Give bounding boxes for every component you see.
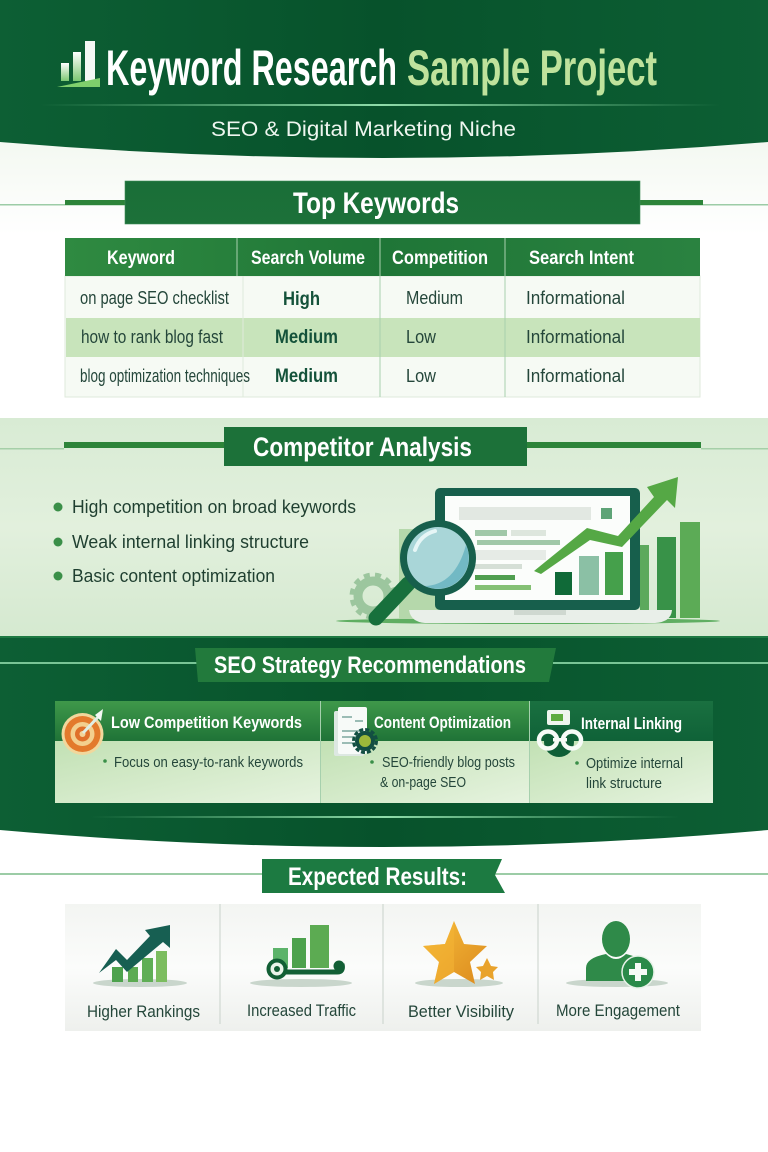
illustration: laptop with magnifier and growth chart: [336, 477, 720, 624]
heading: Competitor Analysis: [224, 427, 527, 466]
row 2: Informational: [526, 327, 625, 347]
result: more engagement: [556, 921, 680, 1020]
result: more engagement: More Engagement: [556, 1001, 680, 1020]
result: better visibility: Better Visibility: [408, 1002, 514, 1021]
heading: SEO Strategy Recommendations: SEO Strategy Recommendations: [214, 652, 526, 679]
row 3: Informational: [526, 366, 625, 386]
card: content optimization: Content Optimization: [374, 713, 511, 732]
result: increased traffic: Increased Traffic: [247, 1001, 356, 1020]
row 1: High: [283, 289, 320, 310]
icon: gear: [352, 575, 394, 617]
row 1: [80, 288, 625, 310]
card: internal linking: link structure: [586, 775, 662, 792]
table header: Competition: [392, 248, 488, 269]
card: internal linking: Optimize internal: [586, 755, 683, 772]
card: low competition keywords: Low Competition Keywords: [111, 713, 302, 732]
row 2: [81, 327, 625, 348]
result: better visibility: [408, 921, 514, 1021]
bullet list: [54, 497, 356, 586]
row 3: Low: [406, 366, 437, 386]
card: low competition keywords: [55, 701, 320, 803]
row 3: [80, 366, 625, 387]
header band: [0, 0, 768, 158]
row 3: Medium: [275, 366, 338, 387]
card: internal linking: [530, 701, 713, 803]
card: low competition keywords: Focus on easy-to-rank keywords: [114, 754, 303, 771]
row 1: Medium: [406, 288, 463, 308]
card: content optimization: & on-page SEO: [380, 774, 466, 791]
table header: Search Intent: [529, 248, 635, 269]
row 2: Medium: [275, 327, 338, 348]
bullet list: High competition on broad keywords: [72, 497, 356, 517]
icon: document and gear: [334, 707, 376, 756]
card: internal linking: Internal Linking: [581, 714, 682, 733]
panel: expected results: [65, 904, 701, 1031]
heading: Expected Results: Expected Results:: [288, 863, 467, 891]
result: increased traffic: [247, 925, 356, 1020]
row 1: on page SEO checklist: [80, 288, 229, 308]
subtitle: SEO & Digital Marketing Niche: [211, 118, 516, 141]
table header: Keyword: [107, 248, 175, 269]
right bars: [640, 522, 700, 618]
result: higher rankings: Higher Rankings: [87, 1002, 200, 1021]
row 3: blog optimization techniques: [80, 366, 250, 386]
icon: magnifier: [376, 520, 476, 618]
panel: SEO strategy recommendations: [0, 636, 768, 847]
icon: target: [62, 709, 104, 755]
heading: Top Keywords: Top Keywords: [293, 187, 459, 220]
arrow: growth trend: [534, 477, 678, 574]
row 1: Informational: [526, 288, 625, 308]
table header: [107, 248, 635, 269]
panel: competitor analysis: [0, 418, 768, 636]
icon: chain links: [539, 710, 581, 757]
bullet list: Weak internal linking structure: [72, 532, 309, 552]
bullet list: Basic content optimization: [72, 566, 275, 586]
heading: Competitor Analysis: Competitor Analysis: [253, 432, 472, 462]
keywords table: [65, 238, 700, 397]
row 2: Low: [406, 327, 437, 347]
card: content optimization: SEO-friendly blog posts: [382, 754, 515, 771]
table header: Search Volume: [251, 248, 365, 269]
heading: Top Keywords: [125, 181, 640, 224]
laptop: [409, 488, 672, 623]
title: Keyword Research: [106, 40, 397, 96]
row 2: how to rank blog fast: [81, 327, 223, 347]
title: Sample Project: [407, 40, 657, 96]
card: content optimization: [321, 701, 529, 803]
icon: bar chart logo: [57, 41, 100, 87]
result: higher rankings: [87, 925, 200, 1021]
